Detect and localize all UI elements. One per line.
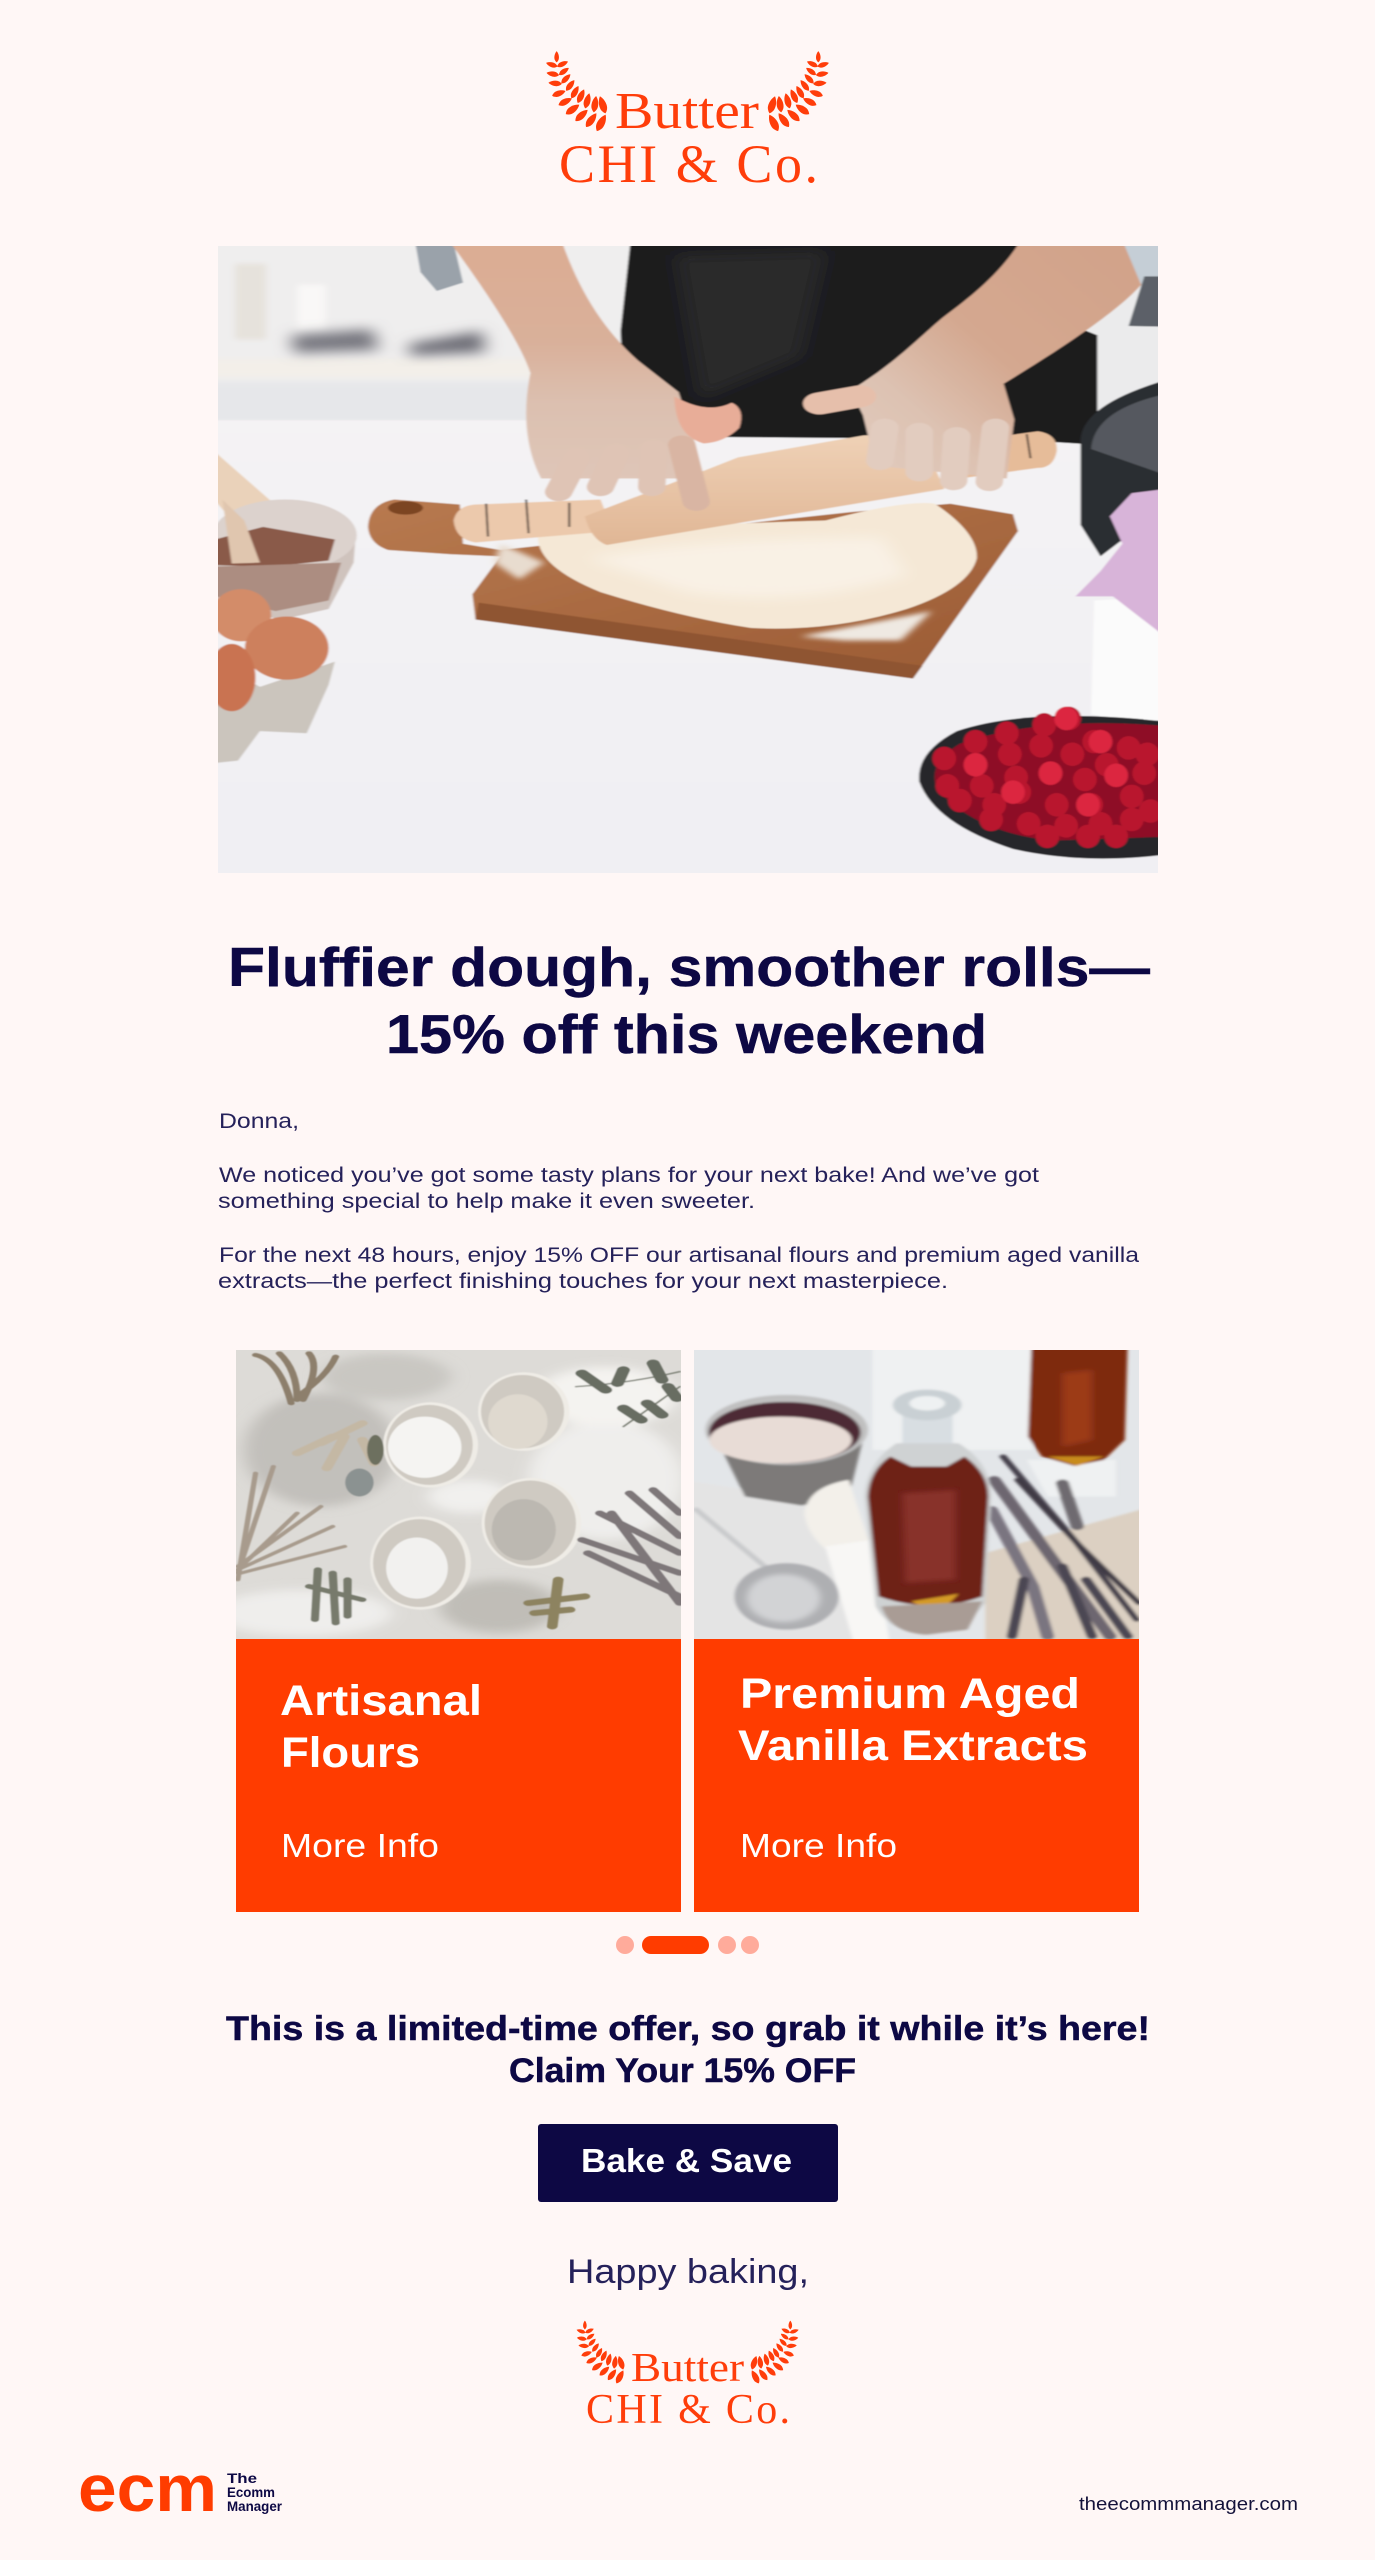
product card: premium aged vanilla extracts: Vanilla Extracts — [738, 1722, 1088, 1770]
orange caption panel — [694, 1639, 1139, 1912]
product card: artisanal flours: Artisanal — [280, 1677, 482, 1725]
pink cloth and white jar — [1076, 488, 1176, 731]
right arm and hand — [819, 230, 1141, 482]
orange caption panel — [236, 1639, 681, 1912]
photo: bowls of flour — [236, 1350, 681, 1639]
body copy: For the next 48 hours, enjoy 15% OFF our artisanal flours and premium aged vanilla — [219, 1243, 1139, 1267]
product card: artisanal flours — [214, 1350, 683, 1912]
metal cup — [705, 1395, 868, 1505]
photo: vanilla bottles and beans — [694, 1350, 1139, 1639]
button: Bake & Save — [538, 2124, 838, 2202]
limited-time offer text: This is a limited-time offer, so grab it while it’s here! — [226, 2010, 1150, 2048]
footer brand logo: Butter CHI & Co. — [576, 2321, 799, 2433]
product card: premium aged vanilla extracts: More Info — [740, 1827, 897, 1864]
vanilla beans — [991, 1457, 1139, 1636]
brand logo: Butter CHI & Co.: CHI & Co. — [559, 134, 818, 194]
product card: premium aged vanilla extracts — [683, 1340, 1151, 1912]
button: Bake & Save: Bake & Save — [581, 2142, 792, 2179]
sign-off text: Happy baking, — [567, 2253, 809, 2291]
main heading — [228, 936, 1150, 1065]
blurred kitchen background — [200, 230, 1176, 449]
dried flowers and herbs — [238, 1353, 680, 1626]
rolling pin — [454, 431, 1057, 545]
icon: left and right wheat wreath — [545, 51, 830, 133]
footer: ecm The Ecomm Manager logo: Manager — [227, 2499, 283, 2514]
footer: ecm The Ecomm Manager logo: The — [227, 2471, 258, 2486]
body copy: something special to help make it even sweeter. — [218, 1189, 755, 1213]
dark baking pan — [1080, 377, 1176, 556]
footer: website address: theecommmanager.com — [1079, 2493, 1298, 2514]
cocoa bowl and spoon — [207, 445, 357, 620]
eggs in carton — [207, 589, 335, 764]
body copy — [218, 1109, 1139, 1293]
main heading: 15% off this weekend — [386, 1003, 987, 1065]
product card: artisanal flours: More Info — [281, 1827, 439, 1864]
apron — [620, 230, 1097, 445]
hero photo: hands rolling dough — [218, 246, 1158, 873]
limited-time offer text — [226, 2010, 1150, 2090]
product card: artisanal flours: Flours — [281, 1729, 420, 1777]
far bottle — [1028, 1340, 1128, 1466]
brand logo: Butter CHI & Co. — [545, 51, 830, 194]
left arm and hand — [441, 230, 741, 502]
cutting board — [368, 499, 1018, 678]
body copy: extracts—the perfect finishing touches for your next masterpiece. — [218, 1269, 948, 1293]
footer: ecm The Ecomm Manager logo: ecm — [78, 2451, 217, 2525]
footer brand logo: Butter CHI & Co.: CHI & Co. — [586, 2387, 790, 2433]
footer: ecm The Ecomm Manager logo: Ecomm — [227, 2485, 275, 2500]
carousel pagination dots — [616, 1936, 759, 1954]
body copy: We noticed you’ve got some tasty plans for your next bake! And we’ve got — [219, 1163, 1039, 1187]
product card: premium aged vanilla extracts: Premium Aged — [740, 1670, 1080, 1718]
limited-time offer text: Claim Your 15% OFF — [509, 2052, 856, 2090]
body copy: Donna, — [219, 1109, 299, 1133]
main heading: Fluffier dough, smoother rolls— — [228, 936, 1150, 998]
bowl of cranberries — [919, 707, 1176, 859]
spoon — [695, 1508, 839, 1630]
footer: ecm The Ecomm Manager logo — [78, 2451, 283, 2525]
main bottle — [864, 1390, 991, 1635]
icon: small wheat wreath — [576, 2321, 799, 2385]
sleeves — [413, 230, 463, 291]
table surface — [200, 420, 1176, 884]
brand logo: Butter CHI & Co.: Butter — [615, 83, 759, 140]
footer brand logo: Butter CHI & Co.: Butter — [631, 2344, 744, 2390]
dough — [538, 503, 977, 629]
